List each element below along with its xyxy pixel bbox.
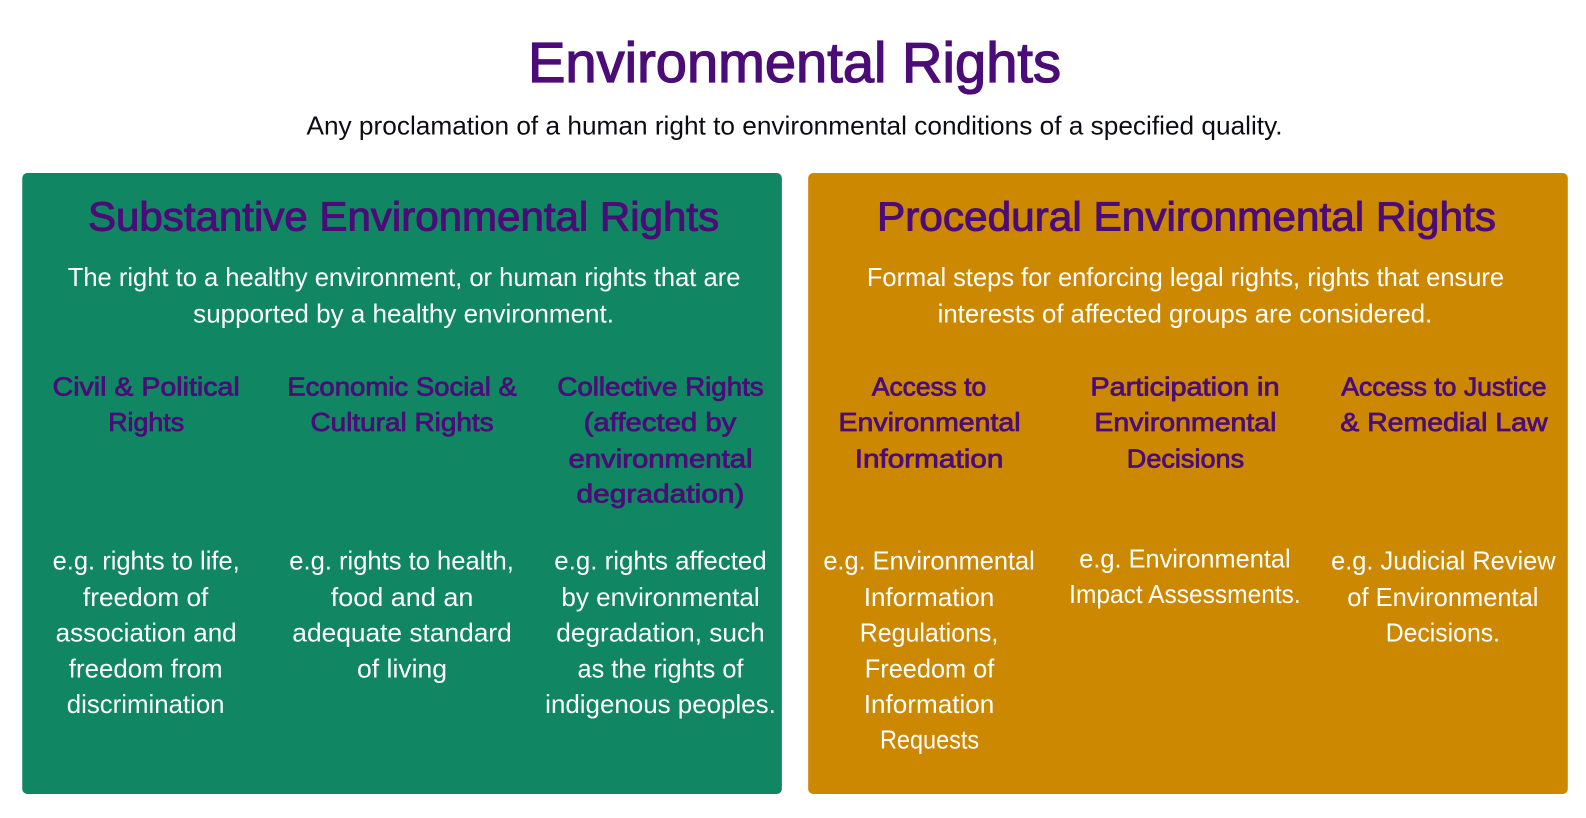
column heading: participation in environmental decisions: Decisions xyxy=(1127,443,1244,473)
column text: access to information examples: Regulations, xyxy=(860,617,998,647)
column text: civil and political examples: discrimination xyxy=(67,689,225,719)
column text: economic social and cultural examples: e.g. rights to health, xyxy=(289,545,514,575)
column text: access to information examples: Information xyxy=(864,689,994,719)
column text: collective rights examples: as the rights of xyxy=(578,654,744,684)
panel heading: procedural: Procedural Environmental Rights xyxy=(877,194,1496,240)
column text: collective rights examples: e.g. rights affected xyxy=(554,545,767,575)
column text: economic social and cultural examples xyxy=(289,545,514,684)
column text: civil and political examples: e.g. rights to life, xyxy=(53,545,240,575)
column heading: access to environmental information: Access to xyxy=(872,371,986,401)
subtitle: Any proclamation of a human right to environmental conditions of a specified quality. xyxy=(306,111,1283,141)
column heading: collective rights: Collective Rights xyxy=(557,371,764,401)
column text: civil and political examples: association and xyxy=(56,617,237,647)
column text: access to information examples: Information xyxy=(864,582,994,612)
column heading: participation in environmental decisions: Participation in xyxy=(1090,371,1280,401)
column text: participation examples: Impact Assessments. xyxy=(1069,579,1301,609)
column heading: economic social and cultural rights xyxy=(287,371,517,437)
column text: civil and political examples xyxy=(53,545,240,719)
column text: civil and political examples: freedom of xyxy=(83,582,209,612)
column text: economic social and cultural examples: of living xyxy=(357,654,447,684)
column text: participation examples: e.g. Environmental xyxy=(1079,543,1291,573)
column text: collective rights examples: degradation, such xyxy=(556,617,765,647)
column heading: economic social and cultural rights: Economic Social & xyxy=(287,371,517,401)
column heading: collective rights xyxy=(557,371,764,509)
panel heading: substantive: Substantive Environmental Rights xyxy=(88,194,719,240)
panel description: substantive: supported by a healthy environment. xyxy=(193,299,614,329)
column heading: participation in environmental decisions xyxy=(1090,371,1280,473)
column heading: civil and political rights xyxy=(53,371,240,437)
panel: substantive environmental rights xyxy=(22,173,782,794)
panel background: green xyxy=(22,173,782,794)
column text: access to justice examples: Decisions. xyxy=(1386,617,1500,647)
column heading: economic social and cultural rights: Cultural Rights xyxy=(311,407,494,437)
column heading: access to environmental information: Environmental xyxy=(839,407,1021,437)
column heading: access to environmental information: Information xyxy=(855,443,1003,473)
column text: access to justice examples xyxy=(1331,545,1557,647)
column text: access to information examples xyxy=(823,545,1035,755)
column heading: access to justice and remedial law: & Remedial Law xyxy=(1340,407,1549,437)
panel description: procedural: Formal steps for enforcing legal rights, rights that ensure xyxy=(867,262,1504,292)
panel description: procedural: interests of affected groups are considered. xyxy=(938,299,1432,329)
column heading: collective rights: degradation) xyxy=(577,479,744,509)
column text: access to justice examples: e.g. Judicial Review xyxy=(1331,545,1557,575)
column text: collective rights examples xyxy=(545,545,776,719)
panel description: procedural xyxy=(867,262,1504,329)
column heading: civil and political rights: Civil & Political xyxy=(53,371,240,401)
column text: participation examples xyxy=(1069,543,1301,609)
column text: access to information examples: Requests xyxy=(880,725,979,755)
column text: collective rights examples: indigenous peoples. xyxy=(545,689,776,719)
column text: civil and political examples: freedom from xyxy=(69,654,223,684)
column heading: collective rights: (affected by xyxy=(584,407,737,437)
panel description: substantive xyxy=(68,262,740,329)
column text: economic social and cultural examples: adequate standard xyxy=(292,617,512,647)
column heading: access to justice and remedial law: Access to Justice xyxy=(1341,371,1547,401)
panel: procedural environmental rights xyxy=(808,173,1568,794)
column heading: civil and political rights: Rights xyxy=(108,407,184,437)
column heading: access to justice and remedial law xyxy=(1340,371,1549,437)
column text: access to information examples: e.g. Environmental xyxy=(823,545,1035,575)
column text: access to justice examples: of Environmental xyxy=(1347,582,1538,612)
panel description: substantive: The right to a healthy environment, or human rights that are xyxy=(68,262,740,292)
column text: collective rights examples: by environmental xyxy=(561,582,760,612)
panel background: orange xyxy=(808,173,1568,794)
column heading: participation in environmental decisions: Environmental xyxy=(1094,407,1276,437)
title: Environmental Rights xyxy=(528,32,1061,95)
column text: access to information examples: Freedom of xyxy=(865,654,995,684)
column heading: collective rights: environmental xyxy=(568,443,753,473)
column text: economic social and cultural examples: food and an xyxy=(331,582,473,612)
column heading: access to environmental information xyxy=(839,371,1021,473)
